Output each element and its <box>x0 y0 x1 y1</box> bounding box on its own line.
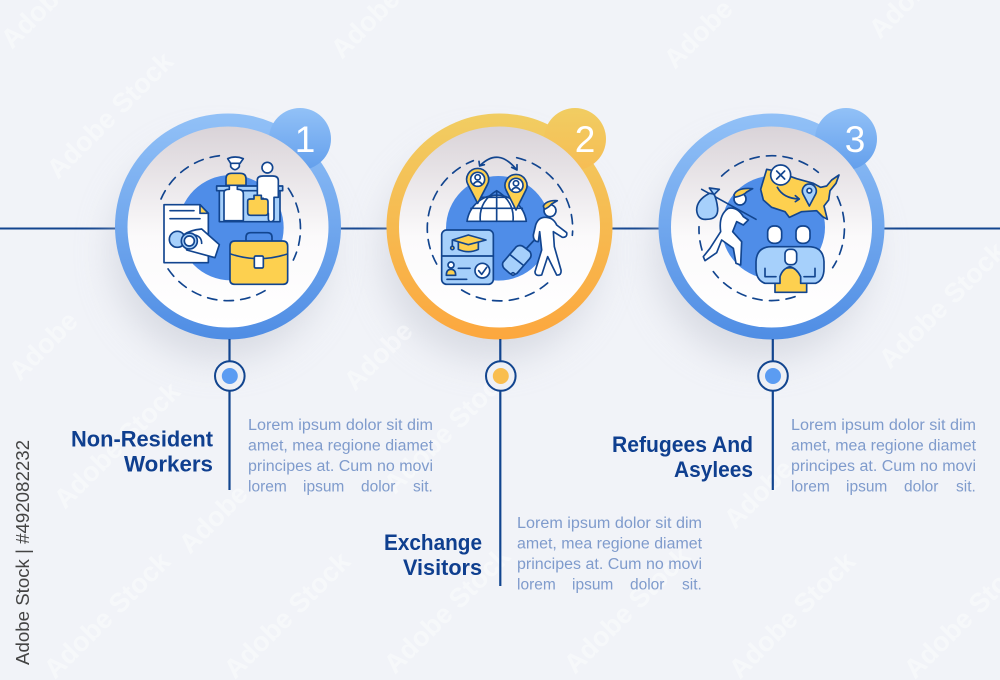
number badge 3 <box>815 108 877 170</box>
icon group: exchange <box>427 157 573 301</box>
inner disc 2 <box>399 126 600 328</box>
node 3 connector <box>758 339 788 490</box>
panel: step 2 medallion <box>386 108 612 340</box>
text block 1: Lorem ipsum dolor sit dim <box>248 417 433 434</box>
panel: step 3 medallion <box>658 108 884 340</box>
text block 3: amet, mea regione diamet <box>791 438 977 454</box>
inner disc 3 <box>671 126 872 328</box>
watermark: Adobe Stock <box>378 541 517 679</box>
panel: step 1 medallion <box>115 108 341 340</box>
text block 3: Lorem ipsum dolor sit dim <box>791 417 976 434</box>
arrow <box>479 157 517 170</box>
number badge 1 <box>269 108 331 170</box>
text block 2: dolor <box>630 576 664 594</box>
text block 3: principes at. Cum no movi <box>791 458 976 475</box>
heading: Non-Resident Workers: Workers <box>124 452 213 476</box>
horizontal connector line <box>0 228 1000 230</box>
card <box>442 230 493 284</box>
text block 3: lorem <box>791 478 830 496</box>
node 1 connector <box>215 339 245 490</box>
node 2 connector <box>486 339 516 586</box>
text block 2: amet, mea regione diamet <box>517 536 703 552</box>
watermark: Adobe <box>173 479 254 559</box>
pins <box>467 168 489 203</box>
traveler <box>544 205 556 217</box>
watermark: Adobe Stock <box>41 46 180 184</box>
suitcase <box>525 240 534 250</box>
family <box>775 268 807 292</box>
stock id label: Adobe Stock | #492082232 <box>13 440 33 665</box>
text block 1: lorem <box>248 478 287 496</box>
text block 2: Lorem ipsum dolor sit dim <box>517 515 702 532</box>
text block 1: principes at. Cum no movi <box>248 458 433 475</box>
text block 2: principes at. Cum no movi <box>517 556 702 573</box>
watermark: Adobe <box>3 306 84 386</box>
circle 3 shadow <box>655 144 871 360</box>
number badge 2 <box>544 108 606 170</box>
text block 1: sit. <box>413 478 433 496</box>
ring 3 <box>658 114 884 340</box>
heading: Refugees And Asylees: Refugees And <box>612 432 753 457</box>
number 2: 2 <box>575 119 595 160</box>
text block 3: sit. <box>956 478 976 496</box>
text block 3: ipsum <box>846 478 887 496</box>
text block 1: dolor <box>361 478 395 496</box>
icon group: refugees <box>697 156 844 301</box>
text block 2: lorem <box>517 576 556 594</box>
walker <box>734 193 746 205</box>
number 1: 1 <box>295 119 315 160</box>
document <box>164 205 208 263</box>
text block 1: amet, mea regione diamet <box>248 438 434 454</box>
watermark: Adobe Stock <box>558 541 697 679</box>
heading: Non-Resident Workers: Non-Resident <box>71 426 213 452</box>
globe <box>467 195 526 221</box>
desk <box>219 191 280 222</box>
watermark: Adobe Stock <box>48 376 187 514</box>
watermark: Adobe <box>718 454 799 534</box>
map <box>761 169 839 219</box>
bundle <box>702 189 756 219</box>
heading: Exchange Visitors: Visitors <box>403 555 482 580</box>
watermark: Adobe <box>338 316 419 396</box>
text block 2: ipsum <box>572 576 613 594</box>
ring 2 <box>386 114 612 340</box>
circle 2 shadow <box>383 144 599 360</box>
inner disc 1 <box>128 126 328 328</box>
ring 1 <box>115 114 341 340</box>
icon group: workers <box>161 156 300 301</box>
text block 1: ipsum <box>303 478 344 496</box>
number 3: 3 <box>845 119 865 160</box>
text block 3: dolor <box>904 478 938 496</box>
circle 1 shadow <box>112 144 328 360</box>
text block 2: sit. <box>682 576 702 594</box>
heading: Exchange Visitors: Exchange <box>384 530 482 555</box>
heading: Refugees And Asylees: Asylees <box>674 457 753 482</box>
watermark: Adobe Stock <box>378 361 517 499</box>
briefcase <box>246 233 272 241</box>
